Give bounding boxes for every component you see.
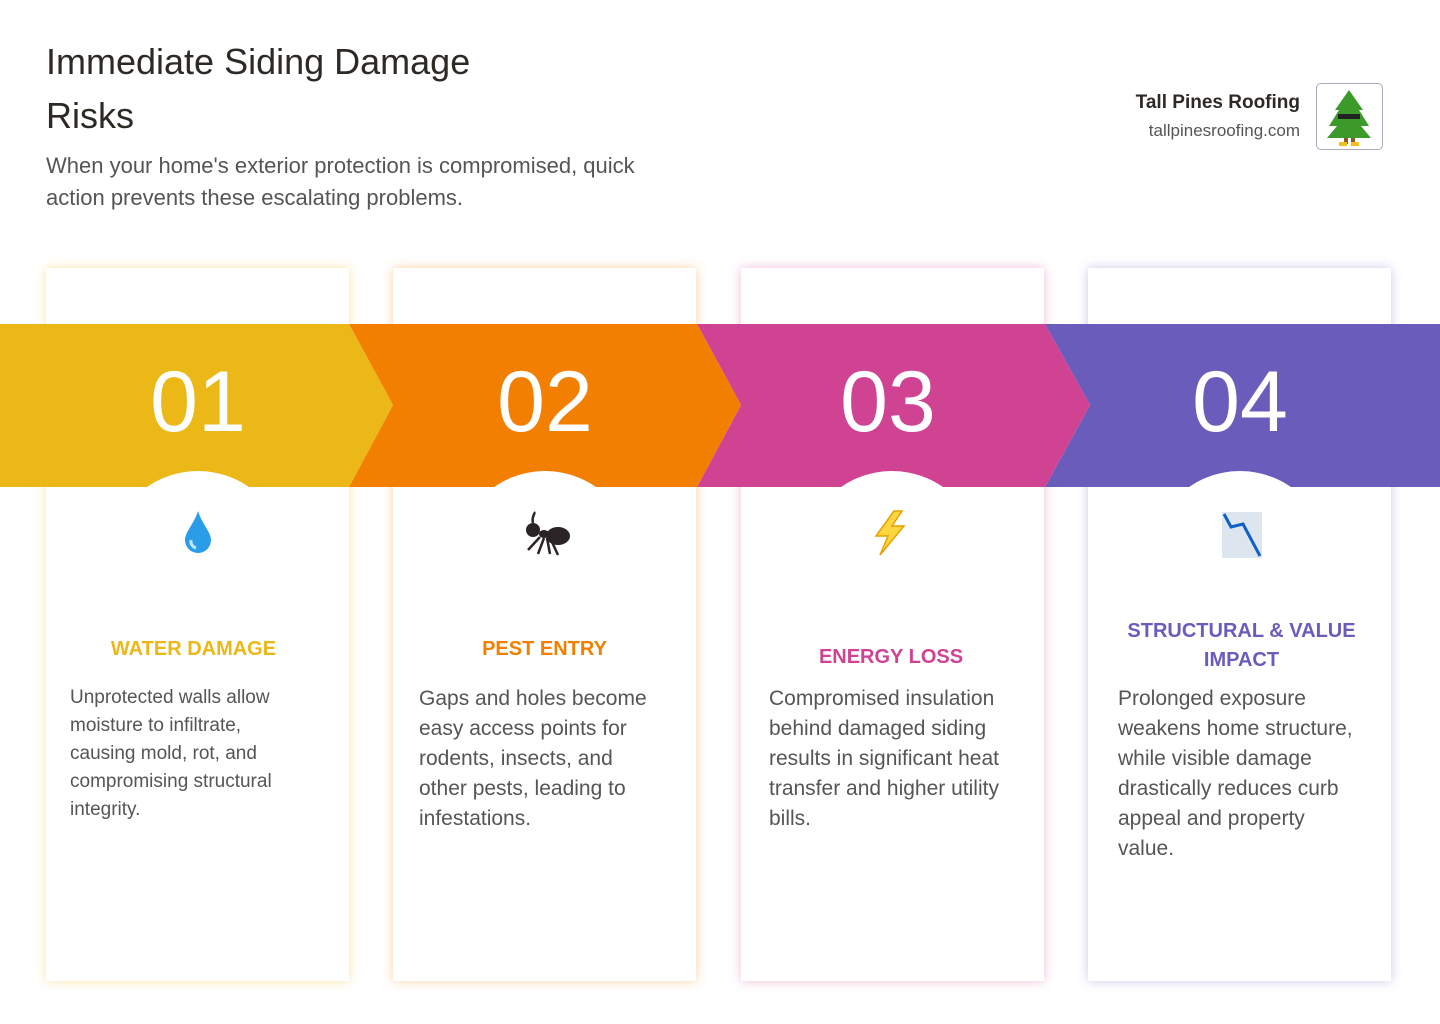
heading: structural: IMPACT — [1204, 649, 1279, 671]
text: structural: Prolonged exposure weakens home structure, while visible damage drastically reduces curb appeal and property value. — [1118, 687, 1353, 860]
text: pest: Gaps and holes become easy access points for rodents, insects, and other pests, leading to infestations. — [419, 687, 647, 830]
card 3 — [741, 268, 1044, 981]
text: energy: Compromised insulation behind damaged siding results in significant heat transfer and higher utility bills. — [769, 687, 999, 830]
number 02: 02 — [497, 354, 593, 450]
heading: structural: STRUCTURAL & VALUE — [1127, 620, 1356, 642]
title: Immediate Siding Damage — [46, 41, 470, 82]
heading: energy loss: ENERGY LOSS — [819, 646, 963, 668]
icon: chart decreasing — [1222, 512, 1262, 558]
icon: ant — [526, 511, 570, 556]
brand: tallpinesroofing.com — [1149, 121, 1300, 140]
card 4 — [1088, 268, 1391, 981]
icon: lightning — [874, 510, 906, 556]
arrow band — [0, 324, 1440, 487]
subtitle: action prevents these escalating problems. — [46, 185, 463, 210]
number 04: 04 — [1192, 354, 1288, 450]
subtitle: When your home's exterior protection is compromised, quick — [46, 153, 635, 178]
number 03: 03 — [840, 354, 936, 450]
logo — [1316, 83, 1383, 150]
title: Risks — [46, 95, 134, 136]
card 2 — [393, 268, 696, 981]
heading: structural — [1127, 620, 1356, 671]
heading: pest entry: PEST ENTRY — [482, 638, 607, 660]
circles — [109, 471, 287, 649]
card 1 — [46, 268, 349, 981]
title — [46, 41, 470, 136]
brand: Tall Pines Roofing — [1136, 92, 1300, 113]
subtitle — [46, 153, 635, 210]
brand — [1136, 92, 1300, 140]
heading: water damage: WATER DAMAGE — [111, 638, 276, 660]
icon: water drop — [185, 511, 211, 553]
number 01: 01 — [150, 354, 246, 450]
text: water: Unprotected walls allow moisture to infiltrate, causing mold, rot, and compromising structural integrity. — [70, 687, 272, 820]
